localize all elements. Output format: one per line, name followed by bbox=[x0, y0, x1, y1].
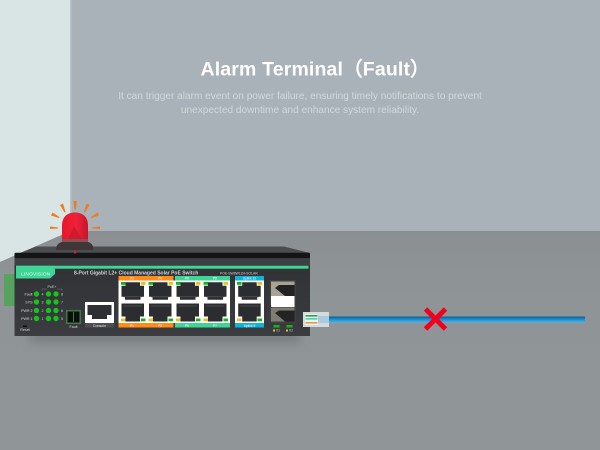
status LEDs: 3 bbox=[42, 300, 44, 304]
uplink ports: Uplink 10 bbox=[243, 276, 256, 280]
PoE port labels: P6 bbox=[185, 276, 189, 280]
green side terminal bbox=[4, 274, 14, 306]
SFP indicators: X2 bbox=[289, 328, 293, 332]
status LEDs: 2 bbox=[42, 309, 44, 313]
status LEDs bbox=[20, 285, 63, 332]
status LEDs: Fault bbox=[24, 292, 32, 296]
status LEDs: PWR 2 bbox=[21, 309, 32, 313]
status LEDs: 1 bbox=[42, 317, 44, 321]
product name: 8-Port Gigabit L2+ Cloud Managed Solar PoE Switch bbox=[74, 270, 198, 276]
PoE port labels: P3 bbox=[158, 324, 162, 328]
alarm beacon bbox=[50, 201, 100, 254]
status LEDs: 5 bbox=[61, 317, 63, 321]
status LEDs: 8 bbox=[61, 292, 63, 296]
status LEDs: 4 bbox=[42, 292, 44, 296]
fault terminal: Fault bbox=[70, 325, 78, 329]
RJ45 plug bbox=[303, 312, 329, 327]
title: Alarm Terminal（Fault） bbox=[200, 58, 430, 80]
status LEDs: 6 bbox=[61, 309, 63, 313]
floor bbox=[0, 231, 600, 450]
status LEDs: PWR 1 bbox=[21, 317, 32, 321]
SFP ports bbox=[270, 280, 296, 324]
description text: It can trigger alarm event on power failure, ensuring timely notifications to prevent bbox=[118, 91, 482, 102]
model number: POE-SW8W12H-SOLAR bbox=[220, 272, 258, 276]
background wall bbox=[0, 0, 600, 232]
PoE port labels bbox=[118, 276, 230, 328]
switch upper face band bbox=[14, 258, 310, 265]
uplink ports bbox=[235, 276, 264, 328]
status LEDs: PoE+ bbox=[48, 285, 56, 289]
description text: unexpected downtime and enhance system reliability. bbox=[181, 105, 419, 116]
beacon base bbox=[56, 242, 94, 250]
PoE port labels: P8 bbox=[213, 276, 217, 280]
switch top plate bbox=[20, 246, 310, 253]
beacon dome bbox=[62, 212, 88, 239]
PoE port labels: P1 bbox=[130, 324, 134, 328]
PoE RJ45 ports bbox=[118, 280, 230, 323]
status LEDs: SYS bbox=[25, 300, 33, 304]
fault terminal bbox=[66, 310, 81, 329]
PoE port labels: P5 bbox=[185, 324, 189, 328]
uplink ports: Uplink 9 bbox=[244, 324, 255, 328]
SFP indicators: X1 bbox=[276, 328, 280, 332]
console port bbox=[85, 302, 114, 328]
PoE port labels: P4 bbox=[158, 276, 162, 280]
switch shadow bbox=[30, 332, 300, 342]
blue network cable bbox=[328, 316, 585, 323]
red cross bbox=[426, 309, 446, 329]
console port: Console bbox=[93, 324, 106, 328]
status LEDs: Reset bbox=[20, 328, 30, 332]
switch front face bbox=[14, 258, 310, 336]
switch dark band bbox=[14, 253, 310, 258]
status LEDs: 7 bbox=[61, 300, 63, 304]
description text bbox=[118, 91, 482, 116]
PoE port labels: P7 bbox=[213, 324, 217, 328]
SFP indicators bbox=[273, 325, 293, 332]
brand badge bbox=[16, 266, 55, 278]
network switch bbox=[14, 246, 310, 336]
brand badge: LINOVISION bbox=[21, 272, 51, 278]
PoE port labels: P2 bbox=[130, 276, 134, 280]
green strip bbox=[16, 266, 308, 269]
left wall bbox=[0, 0, 70, 262]
beacon rays bbox=[50, 201, 100, 229]
